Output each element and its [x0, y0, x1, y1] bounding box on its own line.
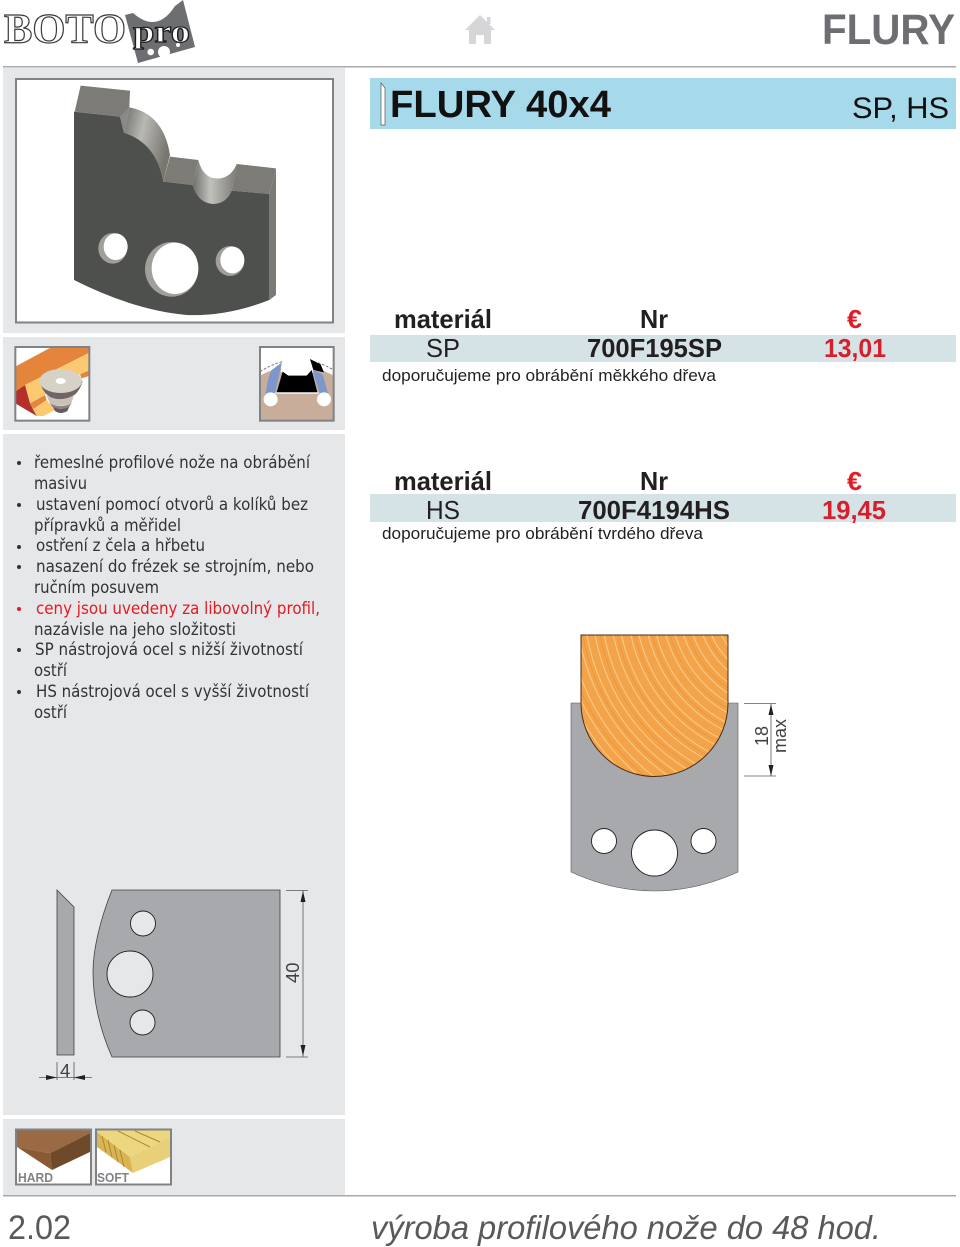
feature list: přípravků a měřidel	[34, 516, 181, 536]
table: SP price: 700F195SP	[587, 333, 722, 363]
knife body	[571, 703, 738, 891]
title band	[370, 78, 956, 129]
column headers	[394, 304, 862, 334]
table: HS price: 19,45	[822, 495, 886, 525]
label: SOFT: SOFT	[97, 1171, 129, 1185]
logo: BOTO pro	[4, 0, 195, 63]
icon: knife edge	[381, 83, 385, 125]
panel: usage icons	[3, 337, 345, 430]
icon: hard wood	[16, 1130, 91, 1185]
knife front view	[93, 890, 280, 1057]
feature list: ostří	[34, 703, 68, 723]
icon: router bit on wood	[15, 347, 90, 421]
dimension 4: 4	[60, 1060, 70, 1081]
feature list	[17, 453, 320, 723]
column headers: €	[847, 304, 862, 334]
column headers: Nr	[640, 304, 668, 334]
dimension 40: 40	[282, 962, 303, 983]
dimension 4	[39, 1060, 92, 1081]
panel: 3D tool image	[16, 79, 333, 322]
page title: FLURY: FLURY	[822, 6, 955, 54]
panel: 3D view background	[3, 68, 345, 333]
feature list: ostření z čela a hřbetu	[36, 536, 205, 556]
logo: BOTO pro: BOTO	[4, 7, 126, 53]
profile drawing	[570, 634, 786, 892]
technical drawing: knife dimensions	[39, 890, 308, 1081]
table: HS price: 700F4194HS	[578, 495, 730, 525]
table: SP price	[370, 304, 956, 385]
column headers: materiál	[394, 466, 492, 496]
feature list: HS nástrojová ocel s vyšší životností	[36, 682, 310, 702]
header rule	[3, 66, 956, 68]
feature list: ručním posuvem	[34, 578, 159, 598]
feature list: nazávisle na jeho složitosti	[34, 620, 236, 640]
values: SP	[426, 333, 460, 363]
column headers	[394, 466, 862, 496]
footer note: výroba profilového nože do 48 hod.	[371, 1209, 881, 1246]
logo: BOTO pro: pro	[133, 13, 190, 49]
knife holes	[98, 233, 244, 297]
feature list: nasazení do frézek se strojním, nebo	[36, 557, 314, 577]
feature list: ustavení pomocí otvorů a kolíků bez	[36, 495, 308, 515]
knife front face	[74, 112, 269, 315]
column headers: €	[847, 466, 862, 496]
table: HS price	[370, 466, 956, 543]
recommendation: doporučujeme pro obrábění tvrdého dřeva	[382, 524, 704, 543]
table: SP price: 13,01	[824, 333, 886, 363]
dimension 18 max: max	[770, 719, 790, 753]
page number: 2.02	[8, 1209, 71, 1247]
values: HS	[426, 495, 460, 525]
icon: home	[465, 15, 495, 44]
label: HARD: HARD	[18, 1171, 53, 1185]
feature list: řemeslné profilové nože na obrábění	[34, 453, 311, 473]
knife holes	[592, 828, 716, 876]
product title: FLURY 40x4	[390, 84, 611, 126]
panel: description and drawing	[3, 434, 345, 1115]
column headers: Nr	[640, 466, 668, 496]
icon: knife section	[260, 347, 334, 422]
knife side view	[57, 890, 74, 1055]
knife holes	[107, 911, 156, 1035]
icon: soft wood	[96, 1130, 171, 1185]
dimension 18 max: 18	[752, 726, 772, 746]
wood workpiece	[580, 634, 728, 777]
column headers: materiál	[394, 304, 492, 334]
dimension 40	[282, 890, 308, 1057]
feature list: masivu	[34, 474, 87, 494]
knife top and curved edges	[75, 86, 276, 300]
feature list: ceny jsou uvedeny za libovolný profil,	[36, 599, 320, 619]
panel: wood types	[3, 1119, 345, 1195]
recommendation: doporučujeme pro obrábění měkkého dřeva	[382, 366, 717, 385]
dimension 18 max	[744, 704, 790, 776]
steel types: SP, HS	[852, 92, 949, 125]
feature list: SP nástrojová ocel s nižší životností	[35, 640, 304, 660]
footer rule	[3, 1195, 956, 1196]
feature list: ostří	[34, 661, 68, 681]
